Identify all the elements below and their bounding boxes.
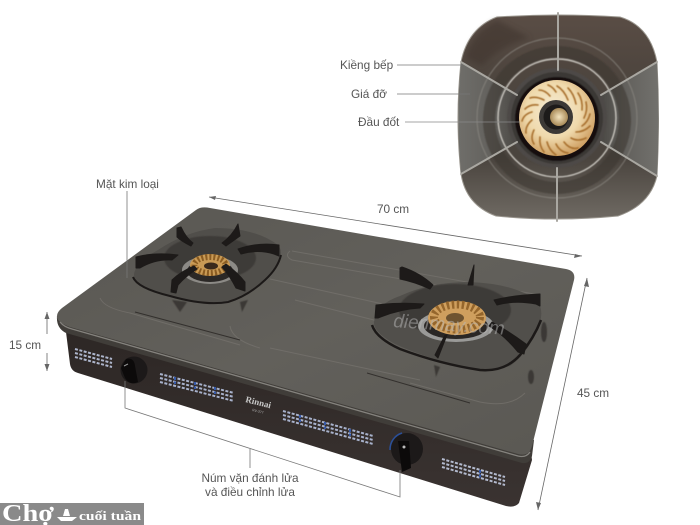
callout: metal surface (96, 177, 159, 278)
decorative dots strip 2 (160, 374, 234, 401)
grate arms (375, 265, 540, 358)
top surface (57, 207, 574, 455)
knob right (390, 433, 423, 472)
front lip (57, 316, 534, 463)
label: Đầu đốt: Đầu đốt (358, 115, 400, 129)
callout: ignition knobs (125, 381, 400, 499)
right burner (372, 265, 547, 384)
grate arms (461, 13, 657, 221)
dimension: depth 45 cm (536, 278, 609, 510)
decorative dots strip 4 (442, 459, 505, 485)
label: Kiềng bếp (340, 58, 462, 72)
logo: Chợ cuối tuần (0, 501, 144, 525)
watermark: dienmay.com (393, 311, 505, 340)
dimension: width 70 cm: 70 cm (377, 202, 409, 216)
burner head (190, 254, 230, 276)
burner plate (458, 15, 658, 219)
tray (374, 282, 541, 370)
left burner (133, 224, 281, 312)
grate arms (136, 224, 279, 293)
tray (134, 228, 281, 303)
stove illustration (57, 207, 574, 507)
decorative dots strip 3 (283, 411, 373, 444)
dimension: width 70 cm (209, 196, 582, 258)
label: Kiềng bếp: Kiềng bếp (340, 58, 394, 72)
front panel (66, 332, 532, 507)
decorative dots strip 1 (75, 349, 112, 367)
surface embossing (100, 251, 540, 404)
callout: metal surface: Mặt kim loại (96, 177, 159, 191)
burner head (428, 301, 486, 335)
inset: burner close-up (458, 13, 658, 221)
callout: ignition knobs: và điều chỉnh lửa (205, 485, 295, 499)
dimension: height 15 cm (9, 312, 50, 371)
dimension: depth 45 cm: 45 cm (577, 386, 609, 400)
logo: Chợ cuối tuần: cuối tuần (79, 508, 142, 523)
dimension: height 15 cm: 15 cm (9, 338, 41, 352)
label: Giá đỡ: Giá đỡ (351, 87, 387, 101)
callout: ignition knobs: Núm vặn đánh lửa (201, 471, 299, 485)
brand: Rinnai: Rinnai (245, 394, 273, 410)
label: Giá đỡ (351, 87, 470, 101)
knob left (120, 356, 148, 384)
plate rings (477, 38, 637, 198)
gold burner head (519, 80, 595, 156)
stove illustration: RV-377 (252, 408, 264, 415)
